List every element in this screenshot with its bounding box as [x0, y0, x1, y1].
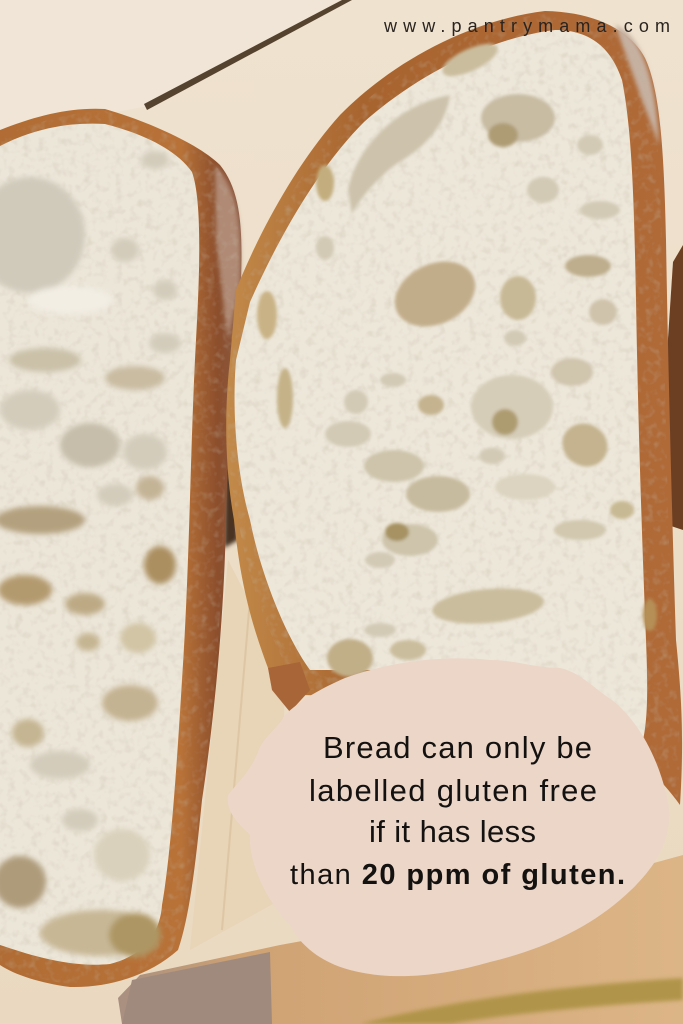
- right crust: [226, 11, 682, 805]
- left crust: [0, 109, 242, 987]
- dark shadow between slices: [224, 300, 238, 548]
- right crumb: [225, 10, 683, 810]
- bread loaf: bottom: [118, 855, 683, 1024]
- left crust floury edge: [215, 165, 240, 340]
- callout text: if it has less: [369, 814, 536, 849]
- bread slice: right: [225, 10, 683, 810]
- right crust flour highlight: [615, 25, 659, 145]
- left crumb holes: [0, 151, 181, 957]
- bread slice: left: [0, 108, 243, 987]
- website url: www.pantrymama.com: [383, 16, 670, 36]
- left crumb: [0, 111, 237, 984]
- callout text: Bread can only be: [323, 730, 592, 765]
- callout text: [290, 730, 625, 891]
- right crumb holes: [257, 37, 657, 677]
- callout text: labelled gluten free: [309, 773, 597, 808]
- right edge dark bread: [664, 245, 683, 530]
- crust tail: [268, 662, 310, 712]
- callout blob: [228, 658, 669, 976]
- callout text: than 20 ppm of gluten.: [290, 859, 625, 891]
